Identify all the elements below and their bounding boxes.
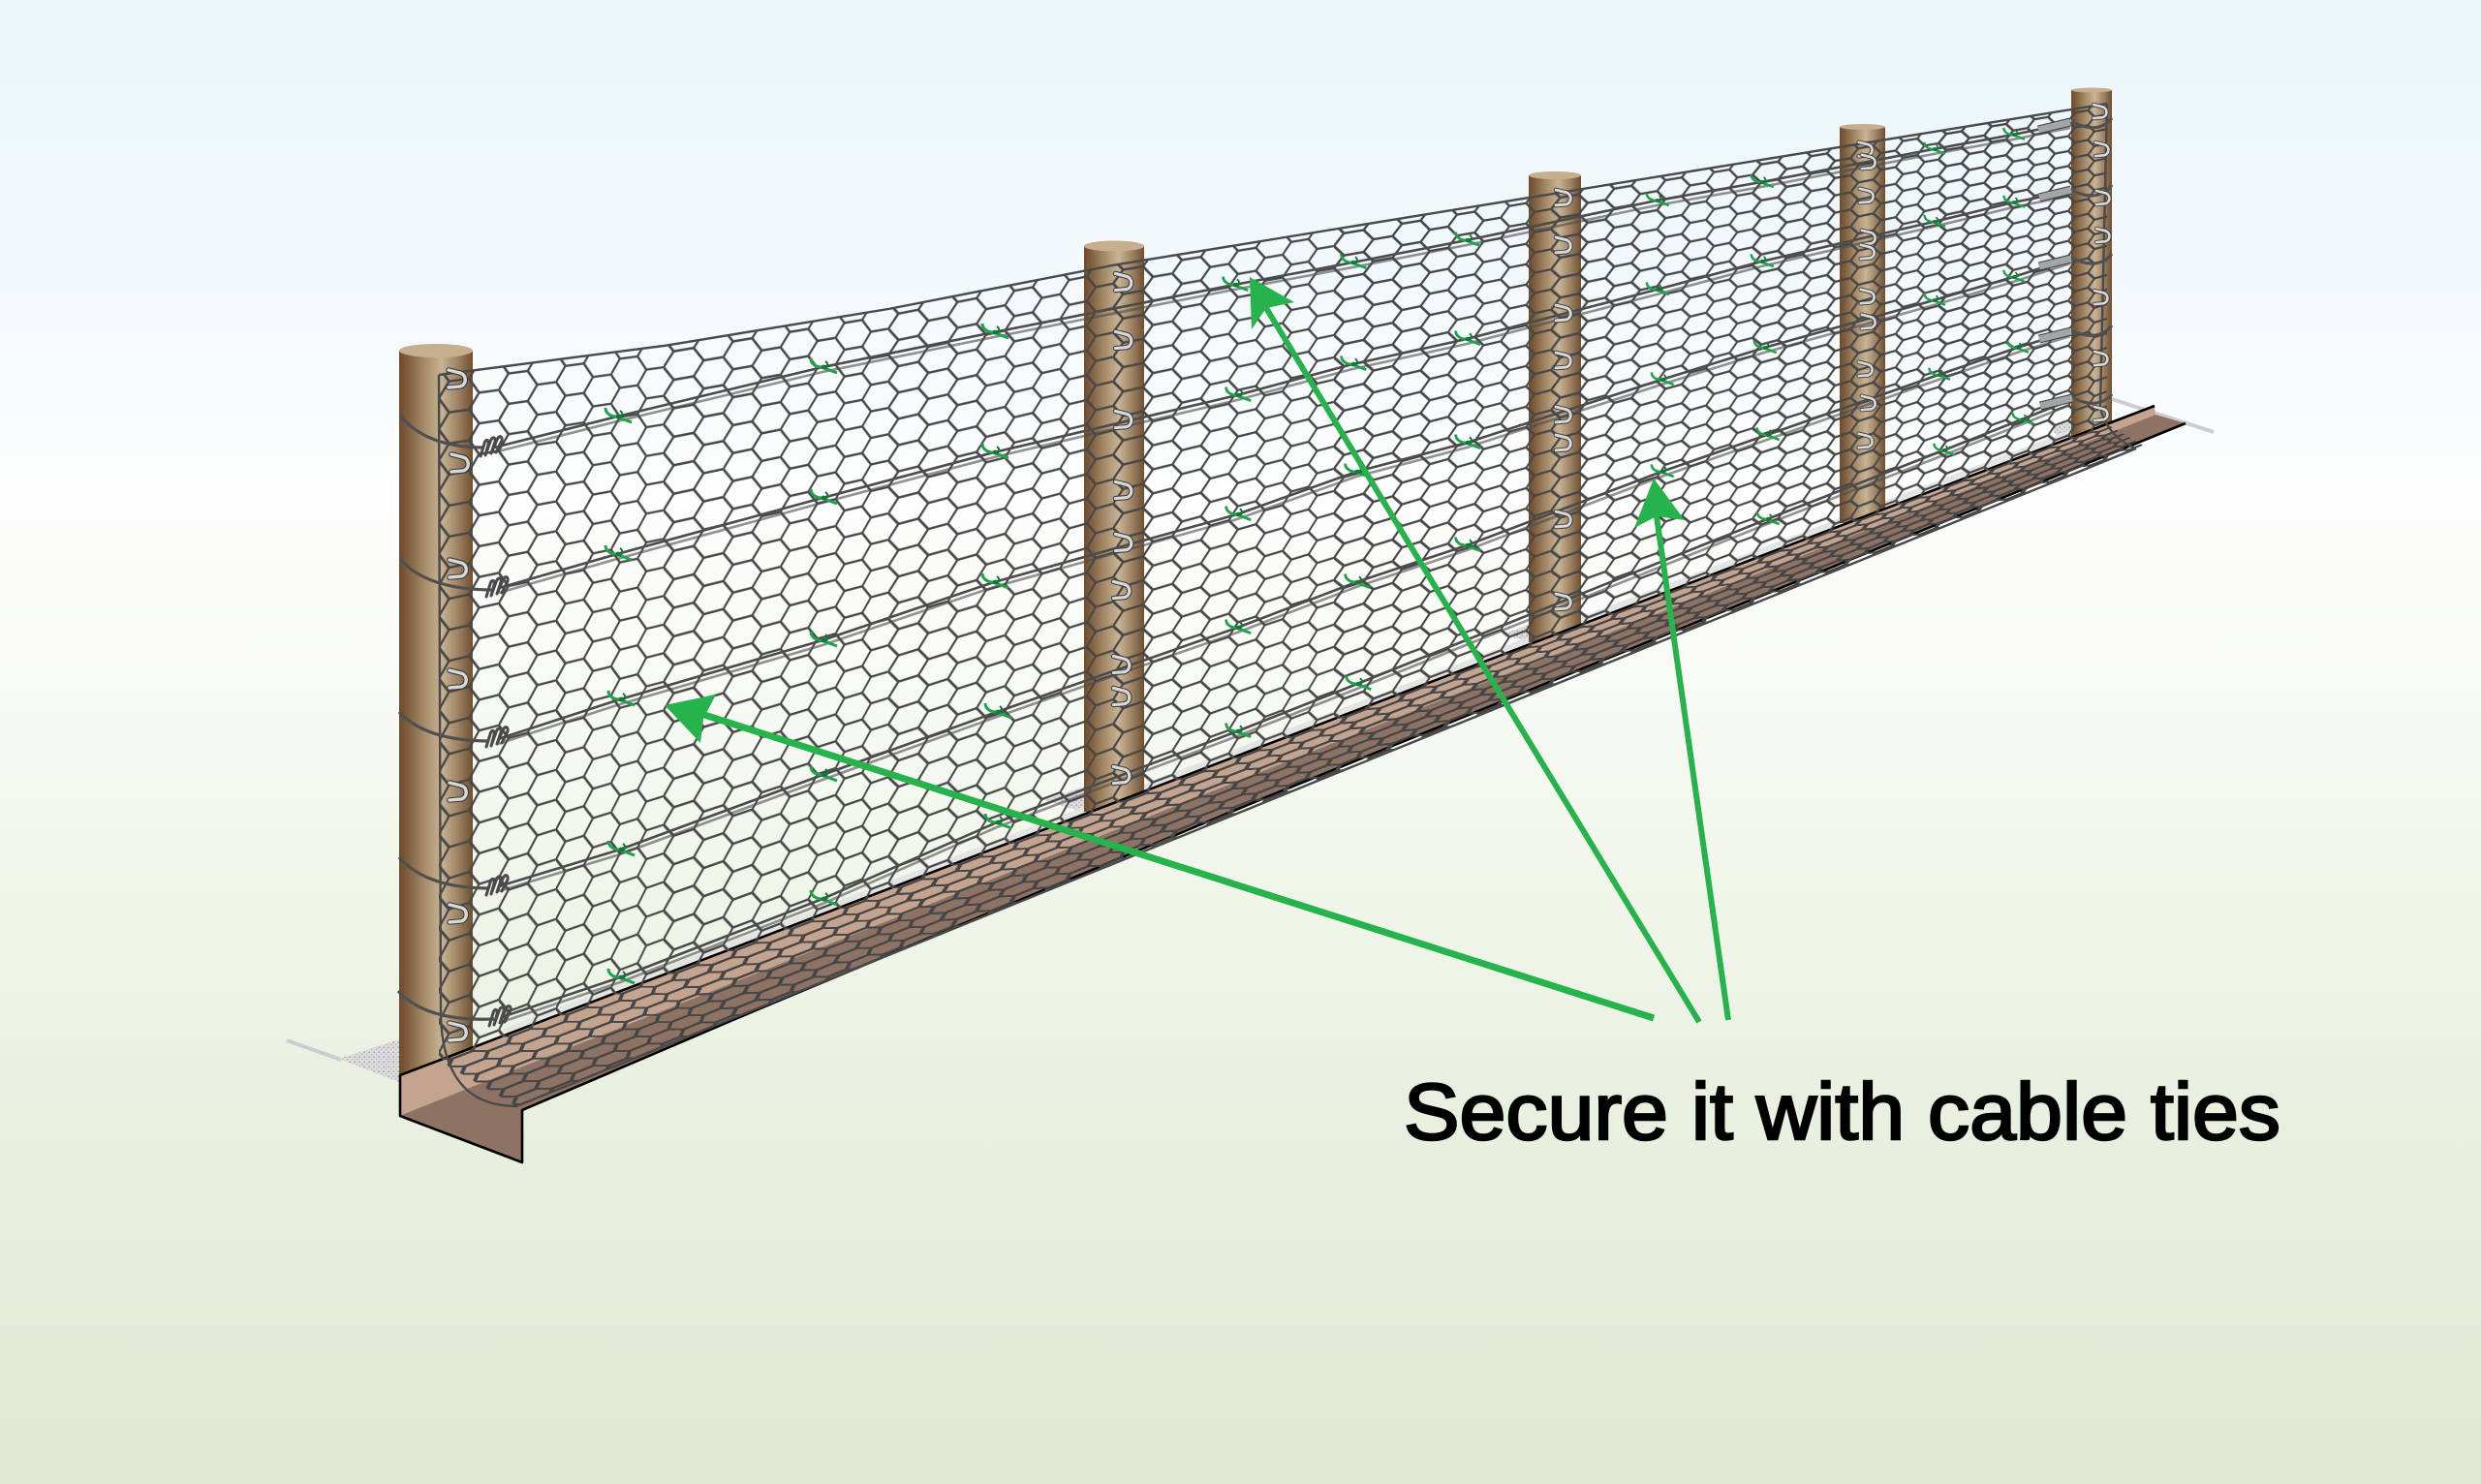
wires wrapped round post 5 <box>2071 118 2112 403</box>
post 2 <box>1084 240 1144 812</box>
wires wrapped round post 1 <box>398 416 494 1019</box>
caption: Secure it with cable ties <box>1404 1067 2280 1157</box>
green cable ties along wire 1 <box>605 128 2025 422</box>
gravel patch at post 1 <box>339 1039 401 1083</box>
ground line right <box>2112 399 2214 432</box>
gravel patch at post 5 <box>2051 420 2081 438</box>
green cable ties along wire 5 <box>608 413 2033 983</box>
wire knots at post 1 <box>481 437 511 1026</box>
trench apron <box>400 406 2186 1162</box>
ground line left <box>287 1040 341 1060</box>
gravel patch at post 2 <box>1045 787 1093 816</box>
mesh outline edges <box>439 104 2136 1106</box>
gravel patch at post 3 <box>1502 625 1542 645</box>
staples on post 3 <box>1556 190 1570 609</box>
green cable ties along wire 3 <box>608 270 2025 705</box>
second strand of each wire <box>494 128 2071 1022</box>
arrow to lower-left tie <box>665 695 1654 1018</box>
staples on post 1 <box>449 370 468 1040</box>
pale strip behind apron <box>504 432 2073 1032</box>
post 1 <box>399 344 473 1079</box>
post 4 <box>1840 124 1885 523</box>
arrow to right tie <box>1634 479 1728 1020</box>
horizontal straining wires <box>494 123 2071 1017</box>
wire tensioners at post 5 <box>2038 122 2072 406</box>
green cable ties along wire 2 <box>605 196 2025 560</box>
wire mesh: folded section lying on the apron <box>442 426 2143 1105</box>
staples on post 4 <box>1859 142 1876 448</box>
wire mesh: vertical wall of hexagons <box>439 107 2107 1060</box>
staples on post 2 <box>1113 273 1132 784</box>
staples on post 5 <box>2093 105 2109 420</box>
green cable ties along wire 4 <box>608 341 2029 855</box>
post 5 <box>2071 87 2112 437</box>
arrow to upper tie <box>1250 277 1699 1022</box>
post 3 <box>1529 171 1581 642</box>
